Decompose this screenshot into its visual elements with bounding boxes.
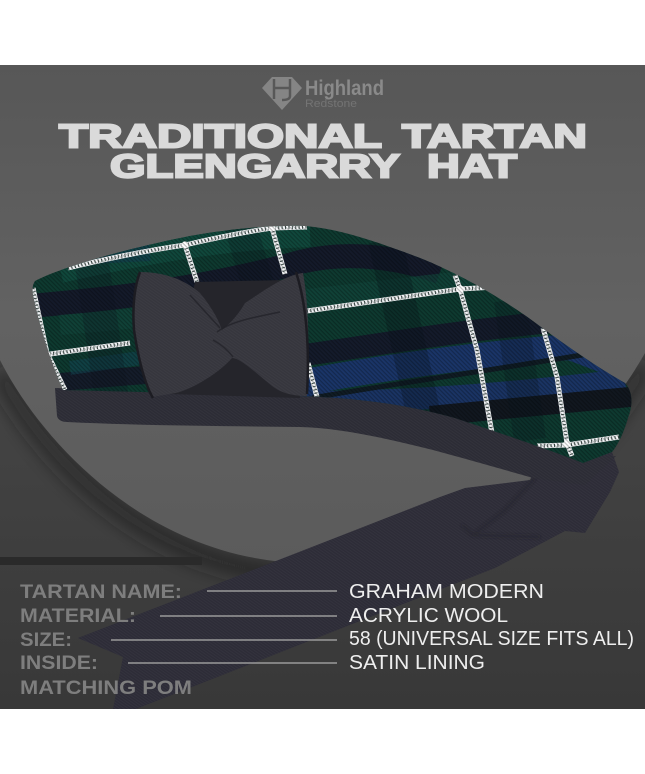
tartan cross bands xyxy=(90,225,530,440)
logo: Redstone xyxy=(305,98,357,110)
specification labels xyxy=(20,581,192,699)
connector lines xyxy=(111,591,337,663)
hat xyxy=(32,226,632,478)
title xyxy=(59,118,587,184)
specification labels: MATERIAL: xyxy=(20,605,136,627)
title: TARTAN xyxy=(402,118,587,154)
tartan crown xyxy=(32,226,632,463)
title: HAT xyxy=(427,148,517,184)
tartan colour bands xyxy=(30,232,640,416)
title: TRADITIONAL xyxy=(59,118,382,154)
divider bar xyxy=(0,557,202,565)
specification labels: INSIDE: xyxy=(20,652,98,674)
hat band xyxy=(55,388,616,485)
specification values: GRAHAM MODERN xyxy=(349,581,544,603)
hat tail ribbon xyxy=(78,452,619,709)
white overcheck lines xyxy=(33,227,619,456)
logo xyxy=(262,77,384,110)
bow xyxy=(133,272,308,398)
specification values: 58 (UNIVERSAL SIZE FITS ALL) xyxy=(349,628,634,650)
specification values: ACRYLIC WOOL xyxy=(349,605,508,627)
specification labels: TARTAN NAME: xyxy=(20,581,182,603)
specification values: SATIN LINING xyxy=(349,652,485,674)
title: GLENGARRY xyxy=(110,148,400,184)
specification labels: MATCHING POM xyxy=(20,677,192,699)
logo: Highland xyxy=(305,77,384,100)
specification values xyxy=(349,581,634,674)
specification labels: SIZE: xyxy=(20,629,72,651)
